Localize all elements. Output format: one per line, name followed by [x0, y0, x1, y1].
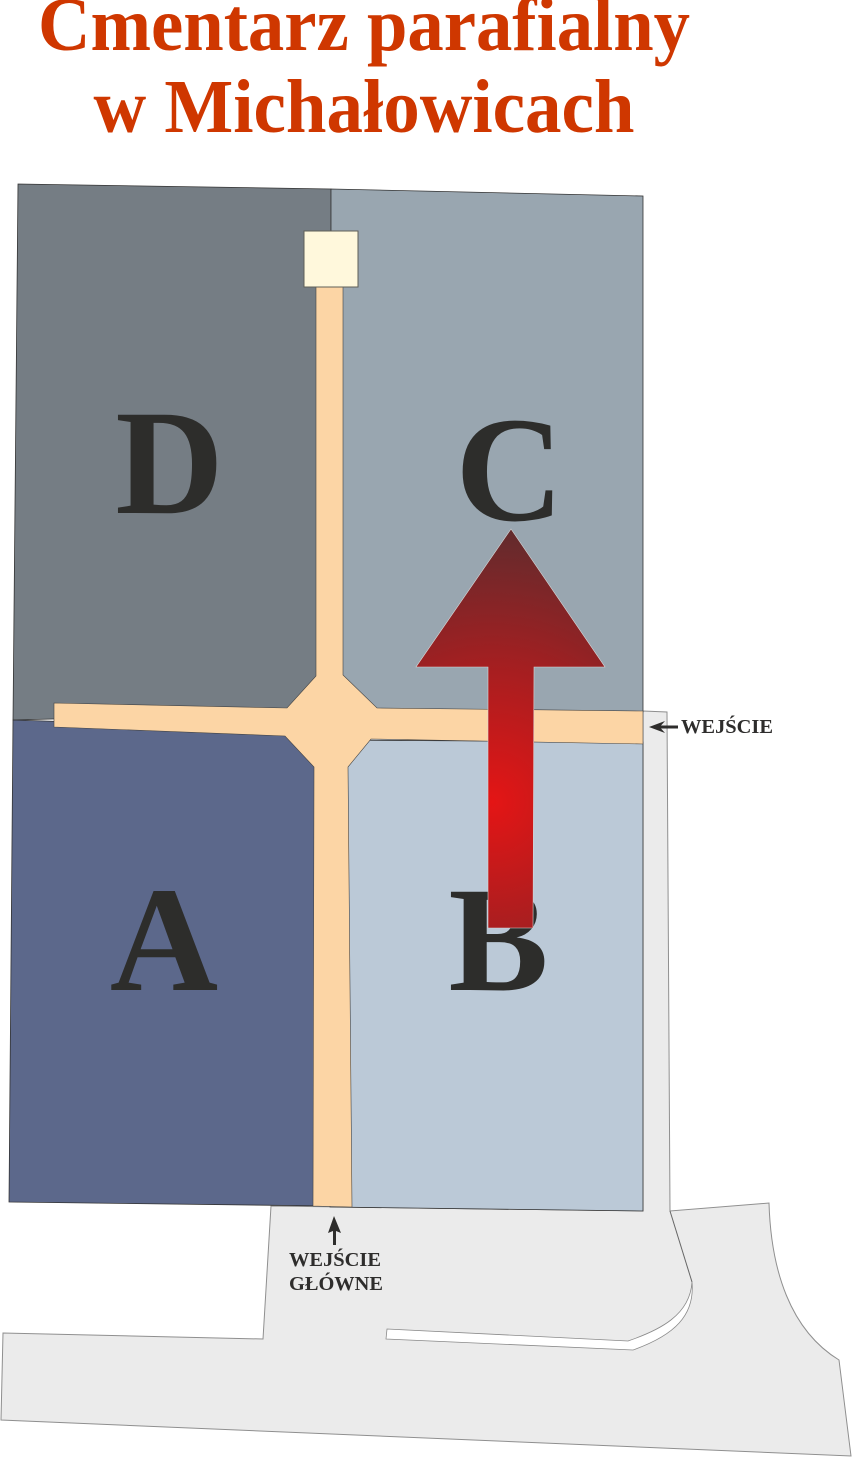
side entrance label: WEJŚCIE	[681, 714, 773, 738]
sector letters: A	[110, 857, 218, 1023]
main entrance label	[289, 1216, 383, 1295]
kerb line	[670, 1211, 692, 1282]
title	[38, 0, 690, 149]
cross-shaped alleys	[54, 285, 643, 1207]
sector letters	[110, 380, 564, 1023]
sector letters: C	[455, 387, 564, 553]
sector letters: B	[448, 857, 549, 1023]
main entrance label: WEJŚCIE	[289, 1247, 381, 1271]
direction arrow	[416, 529, 605, 928]
sector B	[330, 740, 643, 1211]
main entrance label: GŁÓWNE	[289, 1271, 383, 1295]
sector letters: D	[115, 380, 224, 546]
title: w Michałowicach	[94, 65, 634, 149]
sector C	[331, 189, 643, 712]
sector D	[13, 184, 331, 720]
path edge: curved kerb	[386, 1282, 692, 1350]
sector A	[9, 720, 330, 1206]
surrounding grounds	[1, 711, 851, 1456]
side entrance label	[649, 714, 773, 738]
chapel square	[304, 231, 358, 287]
